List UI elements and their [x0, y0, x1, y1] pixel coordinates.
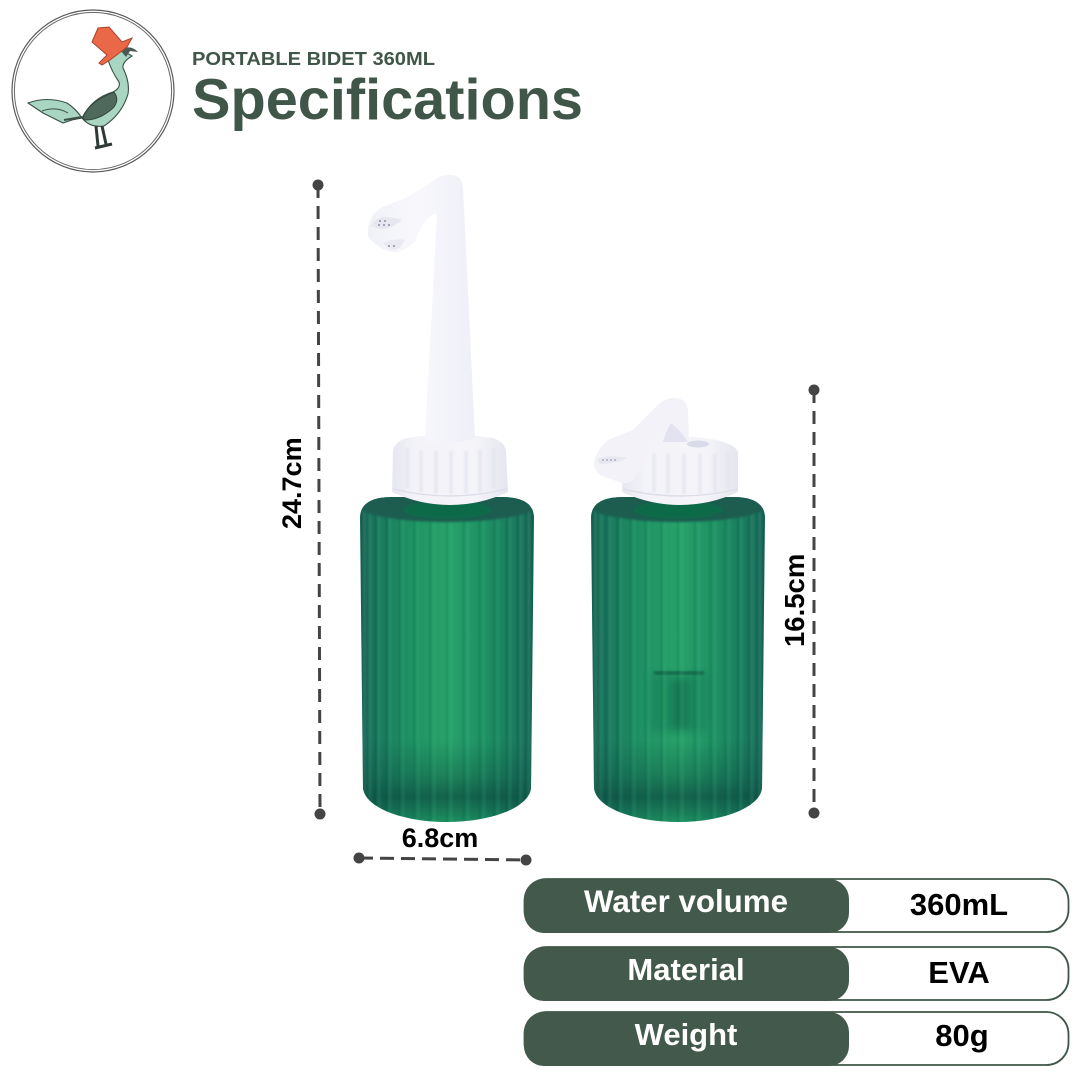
spec row: weight: Weight: [635, 1017, 737, 1052]
wing: [83, 92, 117, 120]
tail feathers: [28, 100, 82, 123]
dimension: height 16.5cm: [779, 384, 820, 818]
hat: [92, 27, 132, 65]
dimension: width 6.8cm: 6.8cm: [402, 823, 478, 853]
spec row: material: EVA: [928, 955, 990, 990]
logo: rooster with top hat: [12, 10, 174, 172]
bottle body: [357, 488, 537, 825]
dimension: width 6.8cm: [354, 823, 532, 866]
beak: [120, 47, 138, 57]
bird body and neck: [82, 50, 132, 126]
spec row: weight: [524, 1012, 1068, 1066]
screw cap: [392, 434, 508, 505]
bottle: extended nozzle: [357, 175, 537, 825]
spec row: water volume: 360mL: [910, 887, 1008, 922]
spec row: material: Material: [627, 952, 745, 987]
spec row: water volume: Water volume: [584, 884, 788, 919]
heading: Specifications: Specifications: [192, 68, 583, 132]
spec row: material: [524, 947, 1068, 1001]
spec row: water volume: [524, 879, 1068, 933]
nozzle: [594, 398, 689, 483]
dimension: height 24.7cm: [277, 180, 326, 820]
bottle: folded nozzle: [588, 398, 768, 825]
legs: [96, 126, 106, 146]
dimension: height 24.7cm: 24.7cm: [277, 437, 307, 529]
dimension: height 16.5cm: 16.5cm: [779, 554, 810, 647]
nozzle spray face: [371, 217, 402, 229]
screw cap: [622, 437, 738, 505]
spec row: weight: 80g: [935, 1018, 989, 1053]
bottle body: [588, 488, 768, 825]
heading: product label: PORTABLE BIDET 360ML: [192, 48, 435, 69]
nozzle: [368, 175, 475, 443]
